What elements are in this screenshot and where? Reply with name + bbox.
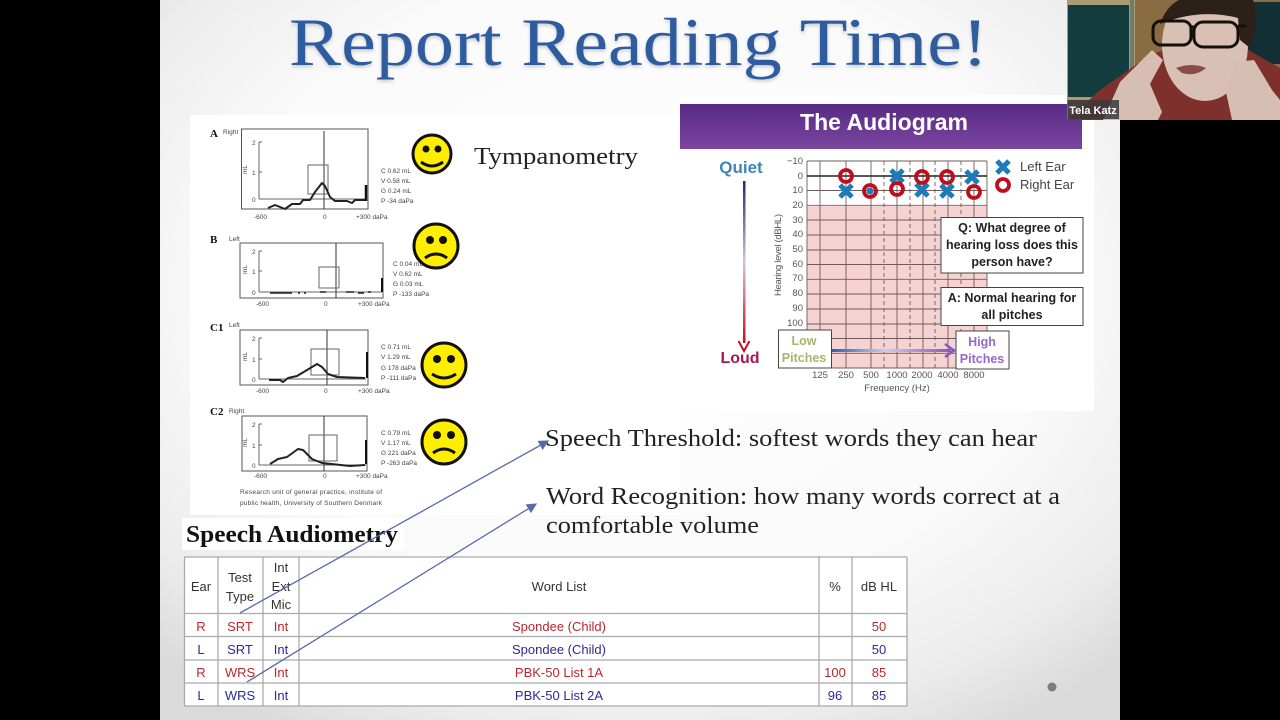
table rows: Spondee (Child) <box>512 619 606 634</box>
panel: audiogram <box>680 95 1094 411</box>
table header: dB HL <box>861 579 897 594</box>
tympanogram C1: 1 <box>252 357 256 364</box>
hearing level axis: −10 <box>787 156 803 167</box>
tympanogram A <box>210 128 414 221</box>
tympanogram C2: 0 <box>252 463 256 470</box>
arrow: SRT to speech threshold <box>240 441 548 613</box>
tympanogram C2: 1 <box>252 443 256 450</box>
hearing level axis: 40 <box>792 229 803 240</box>
table header: Ext <box>272 579 291 594</box>
panel: tympanometry <box>190 115 680 515</box>
tympanogram C2: Right <box>229 408 244 415</box>
tympanogram C1: -600 <box>256 388 269 395</box>
high pitches label: Pitches <box>960 352 1004 366</box>
table rows: 85 <box>872 688 886 703</box>
arrow: WRS to word recognition <box>247 504 536 682</box>
frequency axis: Frequency (Hz) <box>864 383 930 394</box>
table rows: WRS <box>225 665 255 680</box>
quiet label: Quiet <box>719 158 763 177</box>
icon: sad face B <box>414 224 458 268</box>
table rows: 96 <box>828 688 842 703</box>
frequency axis: 1000 <box>886 370 908 381</box>
tympanogram C2: +300 daPa <box>356 473 388 480</box>
tympanogram C2: P -263 daPa <box>381 460 417 467</box>
tympanogram C1: V 1.29 mL <box>381 354 411 361</box>
table rows: R <box>196 665 206 680</box>
hearing level axis title: Hearing level (dBHL) <box>773 214 784 296</box>
icon: sad face C2 <box>422 420 466 464</box>
audiogram header: The Audiogram <box>800 109 968 135</box>
callout: question <box>941 218 1083 273</box>
hearing level axis: 30 <box>792 215 803 226</box>
table header: Ear <box>191 579 212 594</box>
frequency axis: 8000 <box>963 370 985 381</box>
tympanogram C2: 0 <box>323 473 327 480</box>
legend <box>997 159 1075 192</box>
hearing level axis: 100 <box>787 318 803 329</box>
tympanogram B: 1 <box>252 269 256 276</box>
frequency axis: 250 <box>838 370 854 381</box>
tympanogram B: 0 <box>324 301 328 308</box>
table rows: WRS <box>225 688 255 703</box>
tympanogram C2 <box>210 406 417 480</box>
table header: Type <box>226 589 254 604</box>
tympanogram B: G 0.03 mL <box>393 281 424 288</box>
frequency axis <box>812 370 985 394</box>
low pitches label: Low <box>792 334 817 348</box>
audiogram chart <box>773 156 987 394</box>
tympanogram C2: 2 <box>252 422 256 429</box>
tympanogram C1: 2 <box>252 336 256 343</box>
tympanogram C1: +300 daPa <box>358 388 390 395</box>
tympanogram B: 2 <box>252 249 256 256</box>
tympanogram B: mL <box>242 265 249 274</box>
hearing level axis: 20 <box>792 200 803 211</box>
tympanogram A: P -34 daPa <box>381 198 414 205</box>
source note: Research unit of general practice, institute of <box>240 489 382 496</box>
frequency axis: 4000 <box>937 370 959 381</box>
icon: happy face C1 <box>422 343 466 387</box>
table header: % <box>829 579 841 594</box>
tympanogram C1 <box>210 322 416 395</box>
table rows: Int <box>274 665 289 680</box>
callout: question: Q: What degree of <box>958 221 1067 235</box>
tympanogram A: A <box>210 128 218 140</box>
legend: Right Ear <box>1020 177 1075 192</box>
icon: happy face A <box>413 135 451 173</box>
text: word recognition: Word Recognition: how many words correct at a <box>546 484 1060 510</box>
table <box>184 557 907 706</box>
tympanogram C2: V 1.17 mL <box>381 440 411 447</box>
table rows: Int <box>274 642 289 657</box>
tympanogram A: 1 <box>252 170 256 177</box>
right ear markers <box>840 170 980 198</box>
table header: Int <box>274 560 289 575</box>
tympanogram B: 0 <box>252 290 256 297</box>
table rows: SRT <box>227 619 253 634</box>
hearing level axis: 80 <box>792 288 803 299</box>
table rows: SRT <box>227 642 253 657</box>
tympanogram A: mL <box>242 165 249 174</box>
table rows: 50 <box>872 619 886 634</box>
tympanogram A: V 0.58 mL <box>381 178 411 185</box>
frequency axis: 125 <box>812 370 828 381</box>
left ear markers <box>840 170 978 197</box>
table rows <box>196 619 886 703</box>
panel: tympanometry: public health, University of Southern Denmark <box>240 500 383 507</box>
tympanogram C2: -600 <box>254 473 267 480</box>
hearing level axis: 60 <box>792 259 803 270</box>
high pitches label: High <box>968 335 996 349</box>
tympanogram B: C 0.04 mL <box>393 261 423 268</box>
tympanogram B: B <box>210 234 218 246</box>
table rows: Spondee (Child) <box>512 642 606 657</box>
hearing level axis: 0 <box>798 171 803 182</box>
tympanogram C1: Left <box>229 322 240 329</box>
high pitches label <box>956 331 1009 369</box>
tympanogram A: 0 <box>323 214 327 221</box>
table rows: PBK-50 List 2A <box>515 688 603 703</box>
low pitches label: Pitches <box>782 351 826 365</box>
audiogram header <box>680 104 1082 149</box>
arrow: low to high pitches <box>831 344 954 357</box>
tympanogram C1: G 178 daPa <box>381 365 416 372</box>
tympanogram C1: 0 <box>324 388 328 395</box>
tympanogram C1: P -111 daPa <box>381 375 416 382</box>
tympanogram B: V 0.62 mL <box>393 271 423 278</box>
tympanogram C2: C2 <box>210 406 224 418</box>
table rows: 100 <box>824 665 846 680</box>
callout: answer <box>941 288 1083 326</box>
pointer dot <box>1048 682 1056 692</box>
tympanogram C2: C 0.79 mL <box>381 430 411 437</box>
tympanogram B: +300 daPa <box>358 301 390 308</box>
text: speech threshold: Speech Threshold: softest words they can hear <box>545 426 1037 452</box>
hearing level axis: 50 <box>792 244 803 255</box>
hearing level axis <box>787 156 803 329</box>
table rows: Int <box>274 619 289 634</box>
slide background <box>160 0 1120 720</box>
table header: Mic <box>271 597 292 612</box>
tympanogram C2: mL <box>242 438 249 447</box>
hearing level axis: 90 <box>792 303 803 314</box>
low pitches label <box>778 330 832 368</box>
table header: Test <box>228 570 252 585</box>
tympanogram A: 0 <box>252 197 256 204</box>
loud label: Loud <box>720 350 760 367</box>
text: word recognition <box>546 484 1060 539</box>
tympanogram C1: C1 <box>210 322 223 334</box>
table rows: 50 <box>872 642 886 657</box>
tympanogram C1: 0 <box>252 377 256 384</box>
table rows: R <box>196 619 206 634</box>
tympanogram A: G 0.24 mL <box>381 188 412 195</box>
tympanogram C1: mL <box>242 352 249 361</box>
title: Report Reading Time! <box>289 4 988 80</box>
table rows: Int <box>274 688 289 703</box>
callout: answer: A: Normal hearing for <box>948 291 1076 305</box>
table rows: 85 <box>872 665 886 680</box>
tympanogram B: P -133 daPa <box>393 291 429 298</box>
legend: Left Ear <box>1020 159 1066 174</box>
tympanogram C1: C 0.71 mL <box>381 344 411 351</box>
arrow: quiet to loud <box>738 181 750 351</box>
frequency axis: 2000 <box>911 370 933 381</box>
tympanogram A: Right <box>223 129 238 136</box>
heading: tympanometry: Tympanometry <box>474 144 638 170</box>
table rows: L <box>197 688 205 703</box>
callout: question: hearing loss does this <box>946 238 1078 252</box>
heading: speech audiometry: Speech Audiometry <box>186 522 398 548</box>
webcam name tag: Tela Katz <box>1069 105 1117 117</box>
webcam video <box>1067 0 1280 120</box>
callout: answer: all pitches <box>981 308 1043 322</box>
table header: Word List <box>532 579 587 594</box>
tympanogram B <box>210 234 429 308</box>
panel: speech audiometry <box>182 518 907 706</box>
frequency axis: 500 <box>863 370 879 381</box>
tympanogram A: +300 daPa <box>356 214 388 221</box>
tympanogram A: -600 <box>254 214 267 221</box>
tympanogram A: 2 <box>252 140 256 147</box>
callout: question: person have? <box>971 255 1053 269</box>
tympanogram C2: G 221 daPa <box>381 450 416 457</box>
hearing level axis: 10 <box>792 185 803 196</box>
table rows: PBK-50 List 1A <box>515 665 603 680</box>
text: word recognition: comfortable volume <box>546 513 759 539</box>
tympanogram B: -600 <box>256 301 269 308</box>
tympanogram B: Left <box>229 236 240 243</box>
webcam name tag <box>1068 100 1119 119</box>
table rows: L <box>197 642 205 657</box>
hearing level axis: 70 <box>792 273 803 284</box>
tympanogram A: C 0.62 mL <box>381 168 411 175</box>
table header <box>191 560 897 612</box>
